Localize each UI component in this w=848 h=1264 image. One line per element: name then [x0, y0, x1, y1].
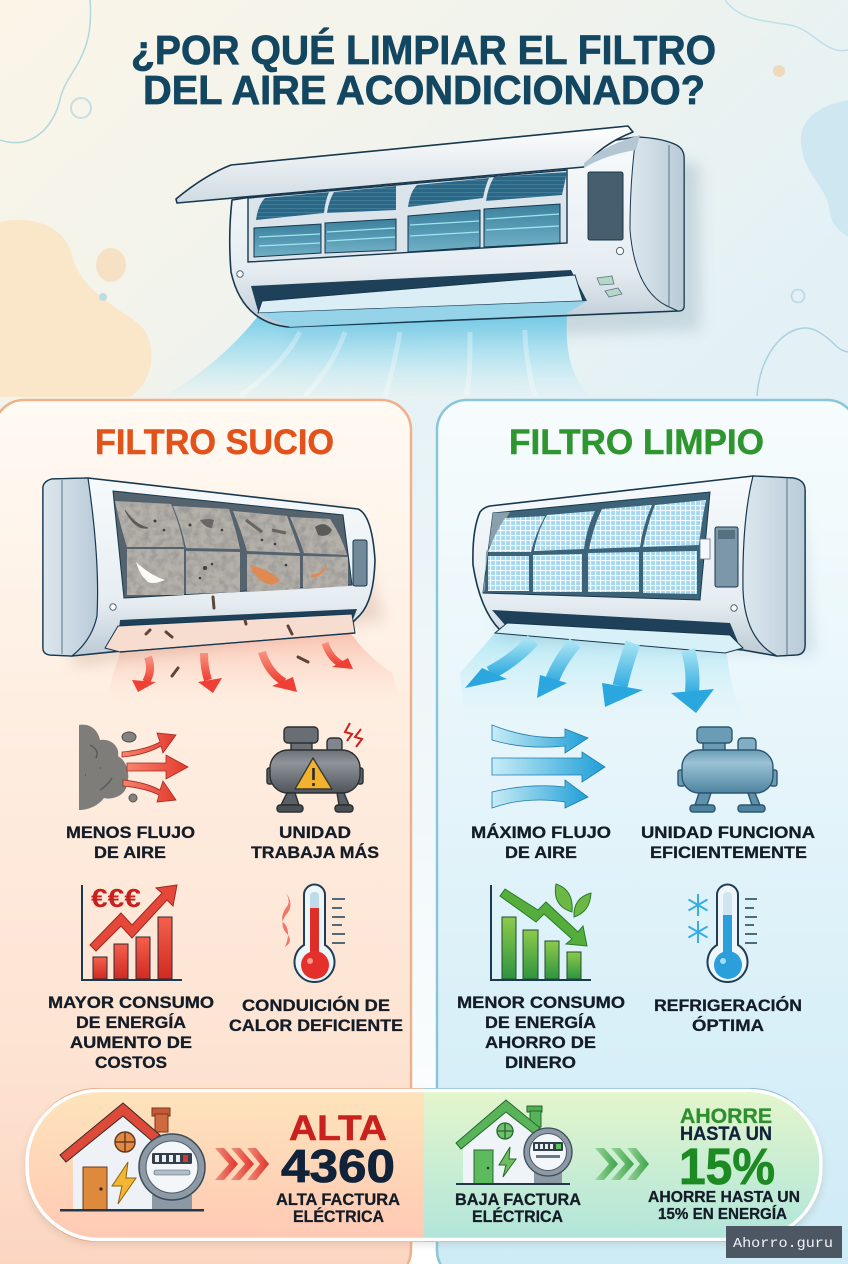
title: DEL AIRE ACONDICIONADO? [143, 67, 705, 113]
icon: chevrons green [595, 1148, 649, 1180]
label: menos flujo de aire: DE AIRE [94, 843, 166, 862]
label: unidad trabaja mas: TRABAJA MÁS [251, 843, 379, 862]
icon: cold thermometer [688, 884, 757, 982]
arrow: warm air 2 [198, 653, 222, 693]
label: menor consumo: DE ENERGÍA [485, 1013, 596, 1032]
label: mayor consumo: DE ENERGÍA [76, 1013, 186, 1032]
label: mayor consumo [48, 993, 214, 1072]
icon: falling cost chart [491, 884, 591, 980]
arrow: warm air 3 [262, 652, 297, 692]
icon: maximum airflow [492, 725, 605, 808]
label: baja factura electrica: ELÉCTRICA [472, 1207, 563, 1226]
stat: ahorre hasta un 15% [648, 1105, 800, 1223]
stat: ahorre hasta un 15%: 15% [679, 1138, 775, 1195]
icon: chevrons red [215, 1148, 269, 1180]
label: baja factura electrica [455, 1190, 581, 1226]
illustration: clean air conditioner [460, 476, 815, 722]
stat: ahorre hasta un 15%: HASTA UN [680, 1124, 772, 1145]
heading: filtro limpio: FILTRO LIMPIO [509, 423, 764, 462]
label: unidad funciona eficientemente [641, 823, 815, 862]
label: menor consumo: AHORRO DE [485, 1033, 596, 1052]
label: maximo flujo de aire: MÁXIMO FLUJO [471, 823, 611, 842]
label: menos flujo de aire: MENOS FLUJO [66, 823, 195, 842]
label: menor consumo [457, 993, 625, 1072]
icon: hot thermometer [282, 884, 345, 982]
title: ¿POR QUÉ LIMPIAR EL FILTRO [131, 27, 716, 73]
stat: alta 4360: ALTA FACTURA [276, 1190, 400, 1209]
label: refrigeracion optima: REFRIGERACIÓN [654, 996, 802, 1015]
label: menos flujo de aire [66, 823, 195, 862]
label: refrigeracion optima: ÓPTIMA [692, 1016, 764, 1035]
stat: alta 4360: ALTA [289, 1109, 387, 1148]
stat: ahorre hasta un 15%: AHORRE [680, 1105, 772, 1128]
label: conducion de calor deficiente: CONDUICIÓN DE [242, 996, 390, 1015]
label: baja factura electrica: BAJA FACTURA [455, 1190, 581, 1209]
icon: house with low meter [456, 1100, 572, 1185]
icon: clogged airflow [79, 725, 188, 810]
label: menor consumo: MENOR CONSUMO [457, 993, 625, 1012]
icon: rising cost chart: €€€ [91, 883, 141, 913]
label: unidad funciona eficientemente: UNIDAD FUNCIONA [641, 823, 815, 842]
label: conducion de calor deficiente [229, 996, 403, 1035]
arrow: warm air 1 [132, 657, 156, 692]
icon: overworked compressor [267, 723, 363, 812]
title [131, 27, 716, 113]
label: mayor consumo: AUMENTO DE [70, 1033, 192, 1052]
stat: alta 4360: 4360 [281, 1140, 395, 1192]
label: mayor consumo: COSTOS [95, 1053, 167, 1072]
label: menor consumo: DINERO [505, 1053, 576, 1072]
icon: efficient compressor [678, 727, 777, 812]
watermark [726, 1226, 842, 1258]
heading: filtro sucio: FILTRO SUCIO [95, 423, 334, 462]
stat: alta 4360 [276, 1109, 400, 1226]
arrow: cool air 4 [671, 650, 714, 713]
label: unidad trabaja mas: UNIDAD [279, 823, 351, 842]
stat: alta 4360: ELÉCTRICA [293, 1207, 384, 1226]
arrow: cool air 2 [537, 643, 575, 698]
arrow: cool air 3 [602, 643, 643, 707]
label: mayor consumo: MAYOR CONSUMO [48, 993, 214, 1012]
icon: rising cost chart [82, 883, 182, 980]
label: maximo flujo de aire: DE AIRE [505, 843, 577, 862]
label: refrigeracion optima [654, 996, 802, 1035]
label: maximo flujo de aire [471, 823, 611, 862]
stat: ahorre hasta un 15%: 15% EN ENERGÍA [658, 1204, 787, 1223]
label: unidad trabaja mas [251, 823, 379, 862]
icon: house with high meter [60, 1103, 205, 1212]
stat: ahorre hasta un 15%: AHORRE HASTA UN [648, 1189, 800, 1206]
illustration: open air conditioner with cold air flow [165, 126, 700, 396]
arrow: warm air 4 [325, 643, 353, 669]
illustration: dirty air conditioner [43, 478, 400, 702]
panel: energy bill comparison [25, 1088, 823, 1244]
label: conducion de calor deficiente: CALOR DEFICIENTE [229, 1016, 403, 1035]
arrow: cool air 1 [465, 640, 533, 688]
label: unidad funciona eficientemente: EFICIENTEMENTE [650, 843, 807, 862]
watermark: Ahorro.guru [733, 1236, 833, 1252]
